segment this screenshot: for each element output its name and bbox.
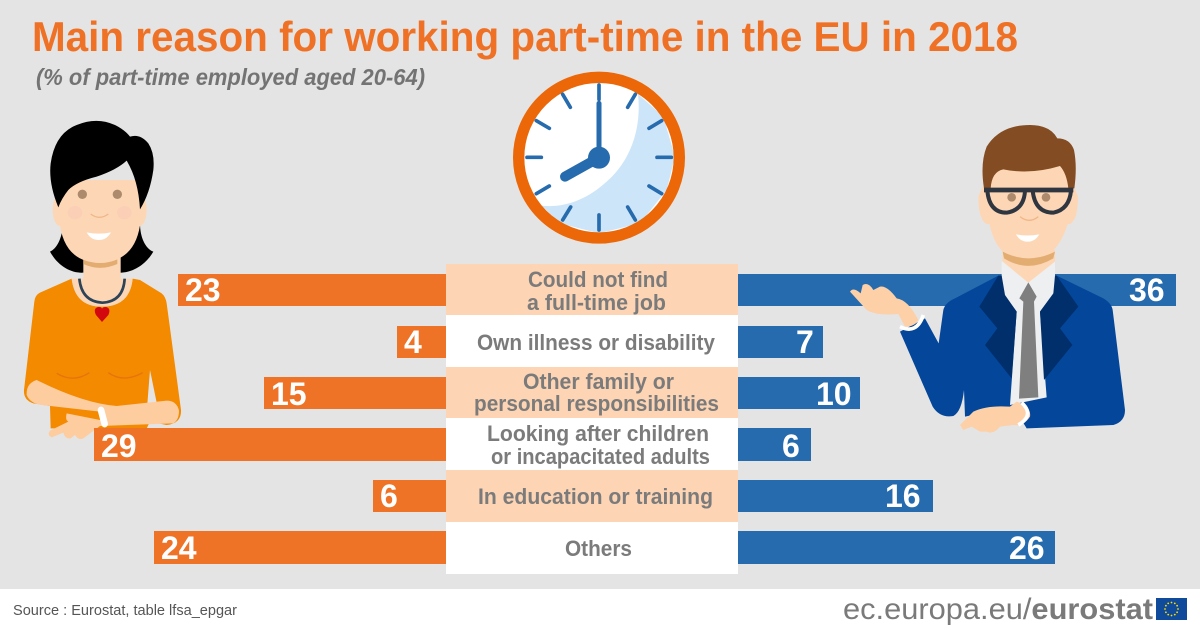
centre category table: Other family or bbox=[523, 369, 674, 394]
values: women: 24 bbox=[161, 530, 197, 566]
values: men: 26 bbox=[1009, 530, 1045, 566]
values: men: 16 bbox=[885, 478, 921, 514]
bars: women (orange) bbox=[94, 274, 446, 564]
centre category table bbox=[446, 264, 738, 574]
centre category table: In education or training bbox=[478, 484, 713, 509]
centre category table: or incapacitated adults bbox=[491, 444, 710, 469]
title: Main reason for working part-time in the EU in 2018 bbox=[32, 13, 1018, 60]
values: men: 6 bbox=[782, 428, 800, 464]
values: men: 36 bbox=[1129, 272, 1165, 308]
centre category table: Own illness or disability bbox=[477, 330, 716, 355]
illustration: woman bbox=[24, 121, 181, 439]
values: men: 10 bbox=[816, 376, 852, 412]
values: women bbox=[101, 272, 422, 566]
illustration: man bbox=[850, 125, 1125, 433]
centre category table: Looking after children bbox=[487, 421, 709, 446]
values: women: 4 bbox=[404, 324, 422, 360]
values: women: 15 bbox=[271, 376, 307, 412]
icon: EU flag bbox=[1156, 598, 1187, 620]
values: women: 6 bbox=[380, 478, 398, 514]
centre category table: Others bbox=[565, 536, 632, 561]
values: men bbox=[782, 272, 1165, 566]
centre category table: Could not find bbox=[528, 267, 668, 292]
centre category table: personal responsibilities bbox=[474, 391, 719, 416]
subtitle: (% of part-time employed aged 20-64) bbox=[36, 64, 425, 90]
values: women: 23 bbox=[185, 272, 221, 308]
centre category table: a full-time job bbox=[527, 290, 666, 315]
source note: Source : Eurostat, table lfsa_epgar bbox=[13, 602, 237, 619]
icon: clock bbox=[518, 77, 680, 238]
values: women: 29 bbox=[101, 428, 137, 464]
bars: men (blue) bbox=[738, 274, 1176, 564]
footer url: ec.europa.eu/eurostat bbox=[843, 593, 1153, 626]
values: men: 7 bbox=[796, 324, 814, 360]
